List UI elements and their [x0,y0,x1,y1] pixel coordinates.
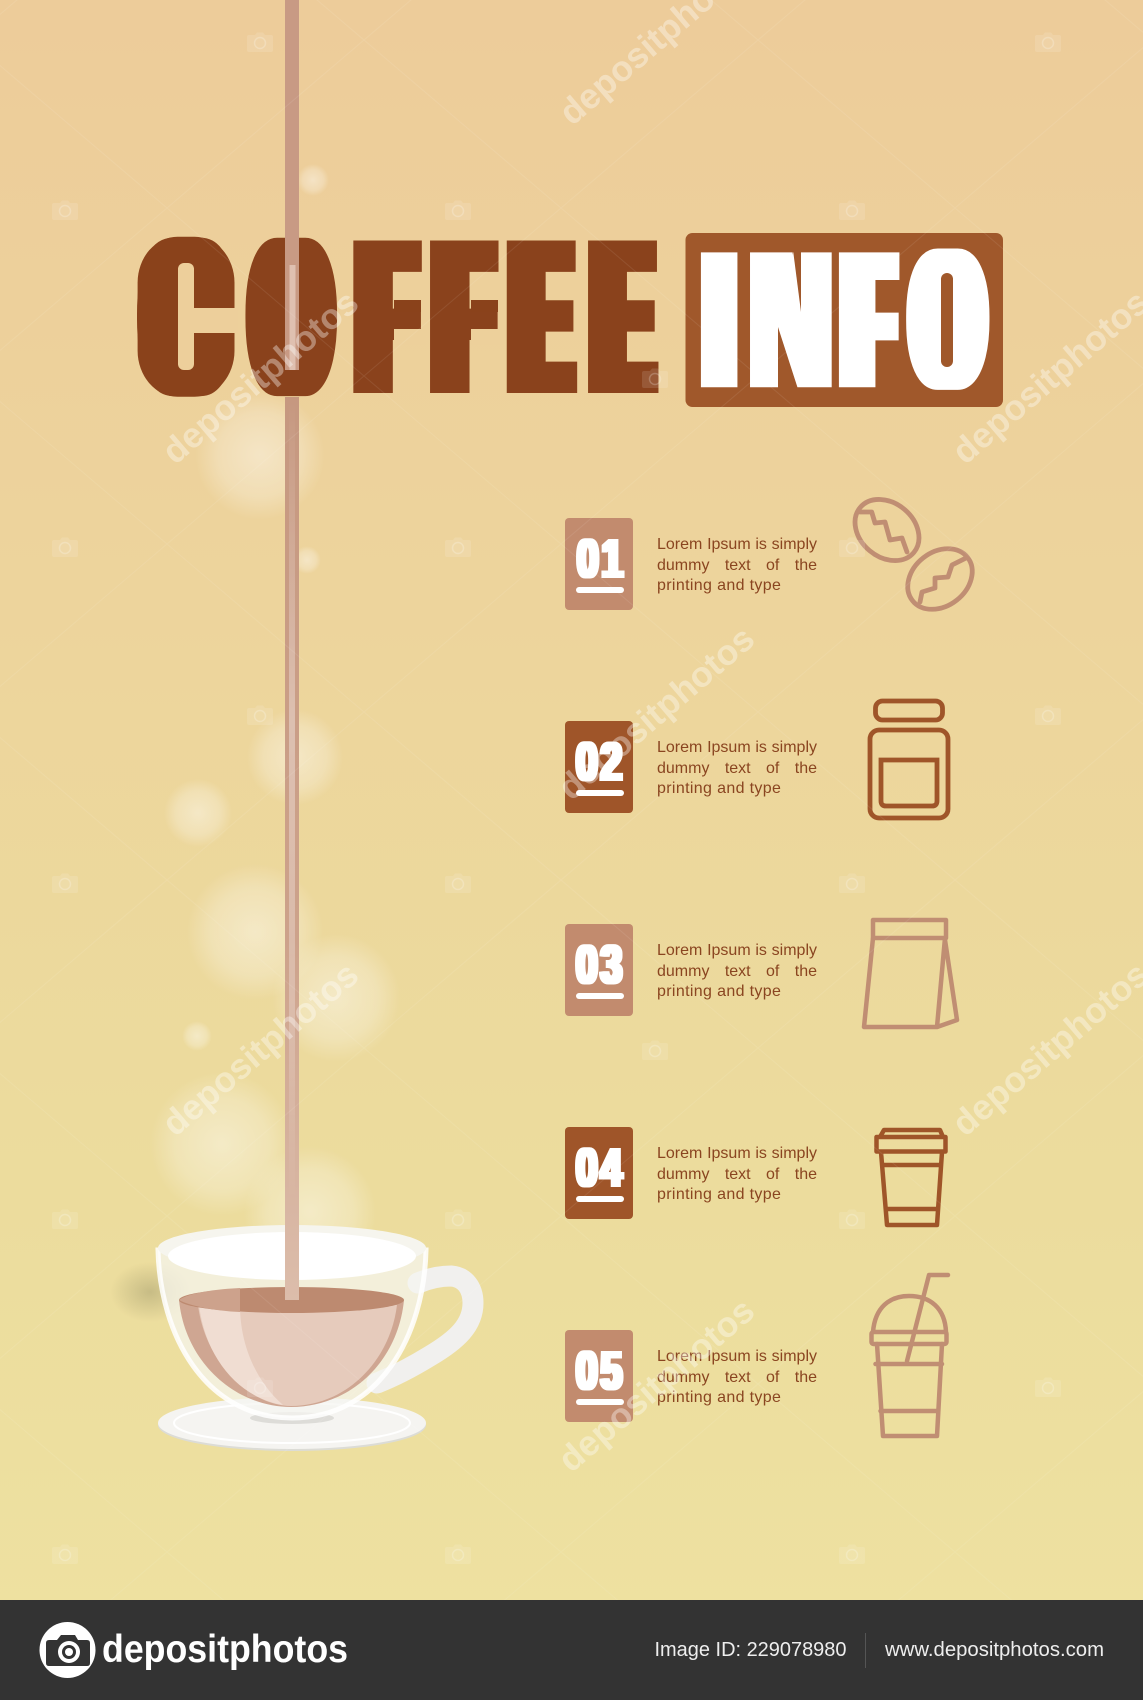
diagonal depositphotos watermarks: depositphotos [550,1290,762,1480]
title word COFFEE: E [597,200,647,434]
number badge 02 [565,721,633,813]
icon: coffee bag [864,920,957,1027]
description text 02: printing and type [657,780,781,797]
website url: www.depositphotos.com [884,1639,1104,1661]
cup shadow [110,1262,190,1322]
icon: coffee beans [843,487,984,622]
camera watermarks [52,32,1061,1564]
description text 03: Lorem Ipsum is simply [657,942,817,959]
coffee [179,1287,404,1407]
diagonal depositphotos watermarks: depositphotos [154,282,366,472]
item row 03 [565,924,817,1016]
footer logo icon [40,1622,96,1678]
description text 02: dummy text of the [657,760,817,777]
number badge 05 [565,1330,633,1422]
description text 01: printing and type [657,577,781,594]
title word COFFEE [138,196,647,439]
cup rim and inside [158,1225,426,1280]
item row 04 [565,1127,817,1219]
description text 02 [657,739,817,797]
title badge INFO [686,212,1003,428]
description text 04 [657,1145,817,1203]
steam bokeh circles [150,164,400,1278]
item row 05 [565,1330,817,1422]
image id: Image ID: 229078980 [654,1639,846,1661]
item row 02 [565,721,817,813]
description text 05: printing and type [657,1389,781,1406]
title word COFFEE: E [516,200,566,434]
title badge INFO: F [848,216,888,424]
diagonal depositphotos watermarks: depositphotos [550,618,762,808]
description text 01: Lorem Ipsum is simply [657,536,817,553]
number badge 04 [565,1127,633,1219]
title badge INFO: N [757,217,824,424]
number badge 01: 01 [577,528,623,588]
diagonal depositphotos watermarks [154,0,1143,1480]
description text 03: printing and type [657,983,781,1000]
description text 04: dummy text of the [657,1166,817,1183]
description text 03: dummy text of the [657,963,817,980]
title badge INFO: O [912,212,983,428]
footer logo wordmark: depositphotos [102,1628,348,1671]
title word COFFEE: O [256,196,327,439]
description text 05: dummy text of the [657,1369,817,1386]
number badge 04: 04 [576,1137,622,1197]
icon: iced cup with straw [872,1275,948,1436]
description text 04: printing and type [657,1186,781,1203]
description text 01: dummy text of the [657,557,817,574]
item row 01 [565,518,817,610]
number badge 05: 05 [576,1340,622,1400]
title badge INFO: I [710,216,728,424]
diagonal depositphotos watermarks: depositphotos [154,954,366,1144]
number badge 01 [565,518,633,610]
handle [377,1276,473,1383]
glass bowl [158,1250,426,1418]
title word COFFEE: C [147,196,222,439]
description text 04: Lorem Ipsum is simply [657,1145,817,1162]
icon: coffee jar [870,701,948,818]
title word COFFEE: F [439,199,487,434]
coffee stream [285,0,299,1300]
icon: takeaway cup [876,1130,946,1225]
number badge 02: 02 [576,731,622,791]
footer bar [0,1600,1143,1700]
number badge 03 [565,924,633,1016]
description text 03 [657,942,817,1000]
description text 02: Lorem Ipsum is simply [657,739,817,756]
coffee cup on saucer [158,1225,473,1451]
saucer [158,1397,426,1451]
number badge 03: 03 [576,934,622,994]
description text 05: Lorem Ipsum is simply [657,1348,817,1365]
title word COFFEE: F [362,199,411,434]
description text 01 [657,536,817,594]
description text 05 [657,1348,817,1406]
